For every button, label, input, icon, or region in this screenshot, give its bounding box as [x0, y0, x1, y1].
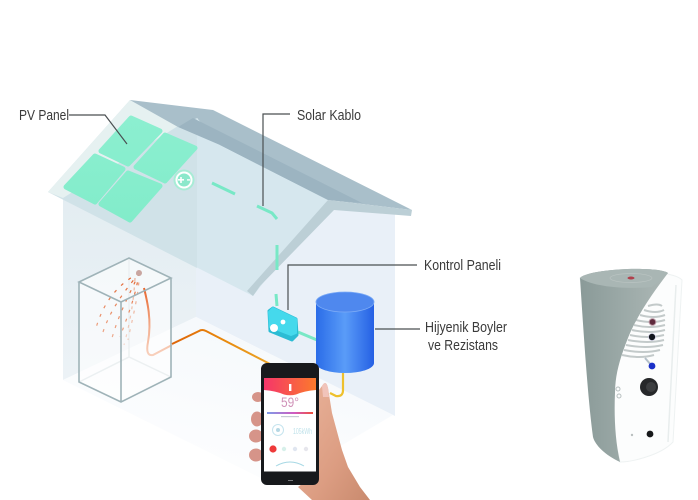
yellow pipe: [330, 373, 343, 396]
roof top surface: [130, 100, 412, 210]
label: ve Rezistans: ve Rezistans: [428, 338, 498, 354]
roof underside left: [48, 100, 197, 268]
boiler inner body: [580, 271, 682, 462]
panel right: [136, 135, 195, 181]
bottom port: [647, 431, 653, 437]
port dark: [648, 333, 656, 341]
bottom arc: [276, 462, 304, 466]
roof fascia: [247, 200, 412, 296]
label: Kontrol Paneli: Kontrol Paneli: [424, 258, 501, 274]
label: PV Panel: PV Panel: [19, 108, 69, 124]
control panel drop: [270, 324, 278, 332]
solar cable: [212, 183, 317, 340]
thumb nail: [322, 383, 329, 397]
shower cabin: [79, 258, 172, 402]
water drops: [96, 273, 139, 345]
shower head: [136, 270, 142, 276]
hand with phone: [249, 363, 370, 500]
panel bottom: [101, 173, 160, 220]
control panel body: [269, 308, 297, 340]
panel left: [66, 156, 123, 202]
hose: [144, 288, 172, 355]
control panel: [269, 308, 297, 340]
fingers: [249, 392, 264, 462]
label: Solar Kablo: Solar Kablo: [297, 108, 361, 124]
coil pipe: [645, 358, 652, 366]
cabin frame: [79, 258, 171, 402]
screen header: [264, 378, 316, 395]
plug icon: [289, 384, 291, 391]
roof inner shadow: [178, 118, 362, 203]
PV panels: [66, 118, 195, 220]
back wall: [196, 118, 395, 416]
heating coil: [622, 304, 665, 357]
roof pale front edge: [48, 100, 178, 198]
shower frame back: [79, 258, 171, 382]
small sensors: [616, 387, 620, 391]
icon: connector: [174, 170, 194, 190]
bar caption: [281, 416, 299, 417]
boiler right highlight: [668, 285, 676, 442]
tank body: [316, 302, 374, 373]
temperature bar: [267, 412, 313, 414]
tank lid: [316, 292, 374, 312]
roof underside right: [196, 118, 328, 296]
floor: [63, 317, 393, 490]
label: Hijyenik Boyler: Hijyenik Boyler: [425, 320, 507, 336]
lid ring: [610, 274, 652, 282]
usage circle: [272, 424, 284, 436]
energy value: 105kWh: [293, 427, 312, 436]
hot water pipe: [172, 330, 272, 365]
panel top: [101, 118, 160, 164]
top cap: [628, 276, 634, 280]
leader lines: [69, 114, 420, 329]
left wall: [63, 130, 196, 380]
home button: [288, 480, 293, 481]
hygienic boiler tank: [316, 292, 374, 396]
cabin glass: [79, 258, 171, 402]
port blue: [649, 363, 655, 369]
jacket top: [580, 269, 668, 288]
jacket: [580, 269, 668, 462]
resistance knob: [640, 378, 658, 396]
house illustration: [48, 100, 412, 490]
phone screen: [264, 378, 316, 472]
temperature: 59°: [281, 395, 299, 410]
phone body: [261, 363, 319, 485]
mode buttons: [269, 445, 277, 453]
port red: [649, 319, 656, 325]
hand palm: [298, 383, 370, 500]
boiler cutaway product: [580, 269, 682, 462]
